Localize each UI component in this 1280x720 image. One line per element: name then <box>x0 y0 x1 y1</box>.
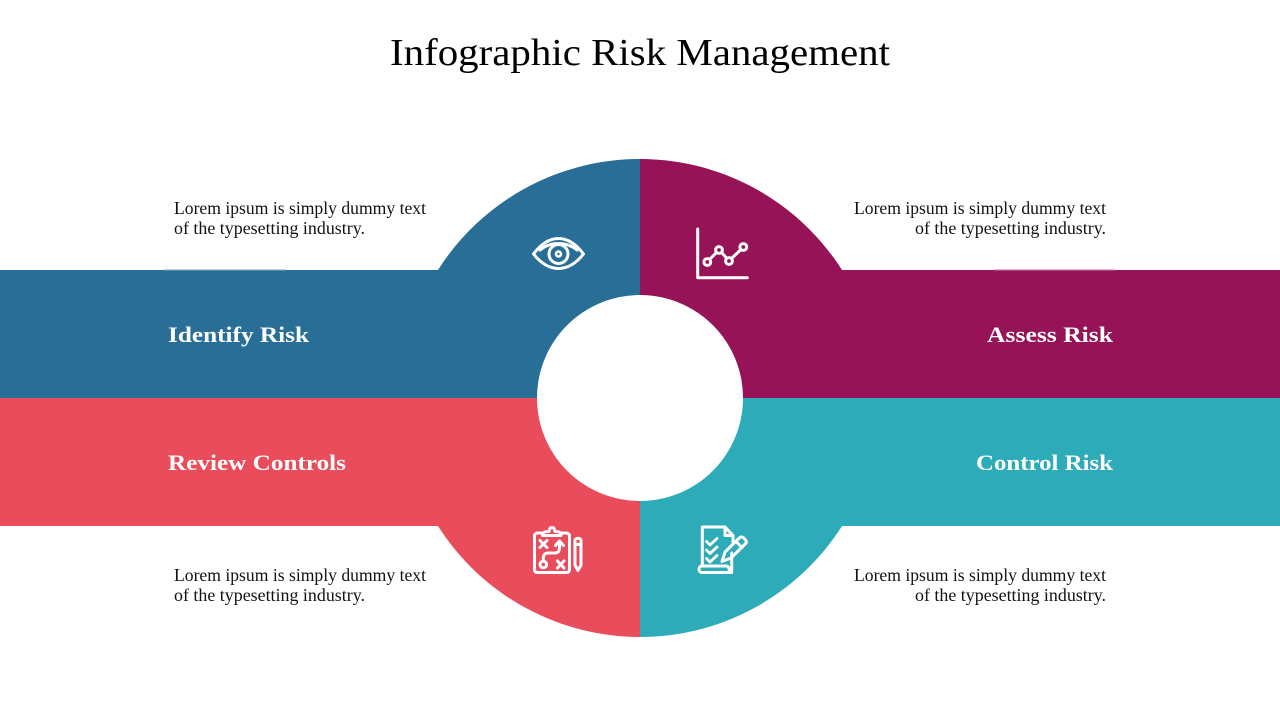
text: control risk description: Lorem ipsum is simply dummy text <box>854 565 1106 585</box>
icon: clipboard plan and pencil <box>534 528 581 572</box>
text: identify risk description: of the typesetting industry. <box>174 218 365 238</box>
panel: assess risk <box>640 159 1280 398</box>
text: review controls description: of the typesetting industry. <box>174 585 365 605</box>
text: control risk description: of the typesetting industry. <box>915 585 1106 605</box>
title: Infographic Risk Management <box>390 32 890 74</box>
text: review controls description: Lorem ipsum is simply dummy text <box>174 565 426 585</box>
label: control risk: Control Risk <box>976 450 1114 475</box>
text: identify risk description: Lorem ipsum is simply dummy text <box>174 198 426 218</box>
text: assess risk description <box>854 198 1106 238</box>
icon: eye <box>534 238 584 268</box>
icon: line chart <box>698 229 747 278</box>
panel: review controls <box>0 398 640 637</box>
panel: identify risk <box>0 159 640 398</box>
text: control risk description <box>854 565 1106 605</box>
text: review controls description <box>174 565 426 605</box>
panel: control risk <box>640 398 1280 637</box>
text: assess risk description: Lorem ipsum is simply dummy text <box>854 198 1106 218</box>
text: assess risk description: of the typesetting industry. <box>915 218 1106 238</box>
label: identify risk: Identify Risk <box>168 322 310 347</box>
text: identify risk description <box>174 198 426 238</box>
label: review controls: Review Controls <box>168 450 346 475</box>
label: assess risk: Assess Risk <box>987 322 1114 347</box>
icon: checklist and pencil <box>699 527 746 572</box>
